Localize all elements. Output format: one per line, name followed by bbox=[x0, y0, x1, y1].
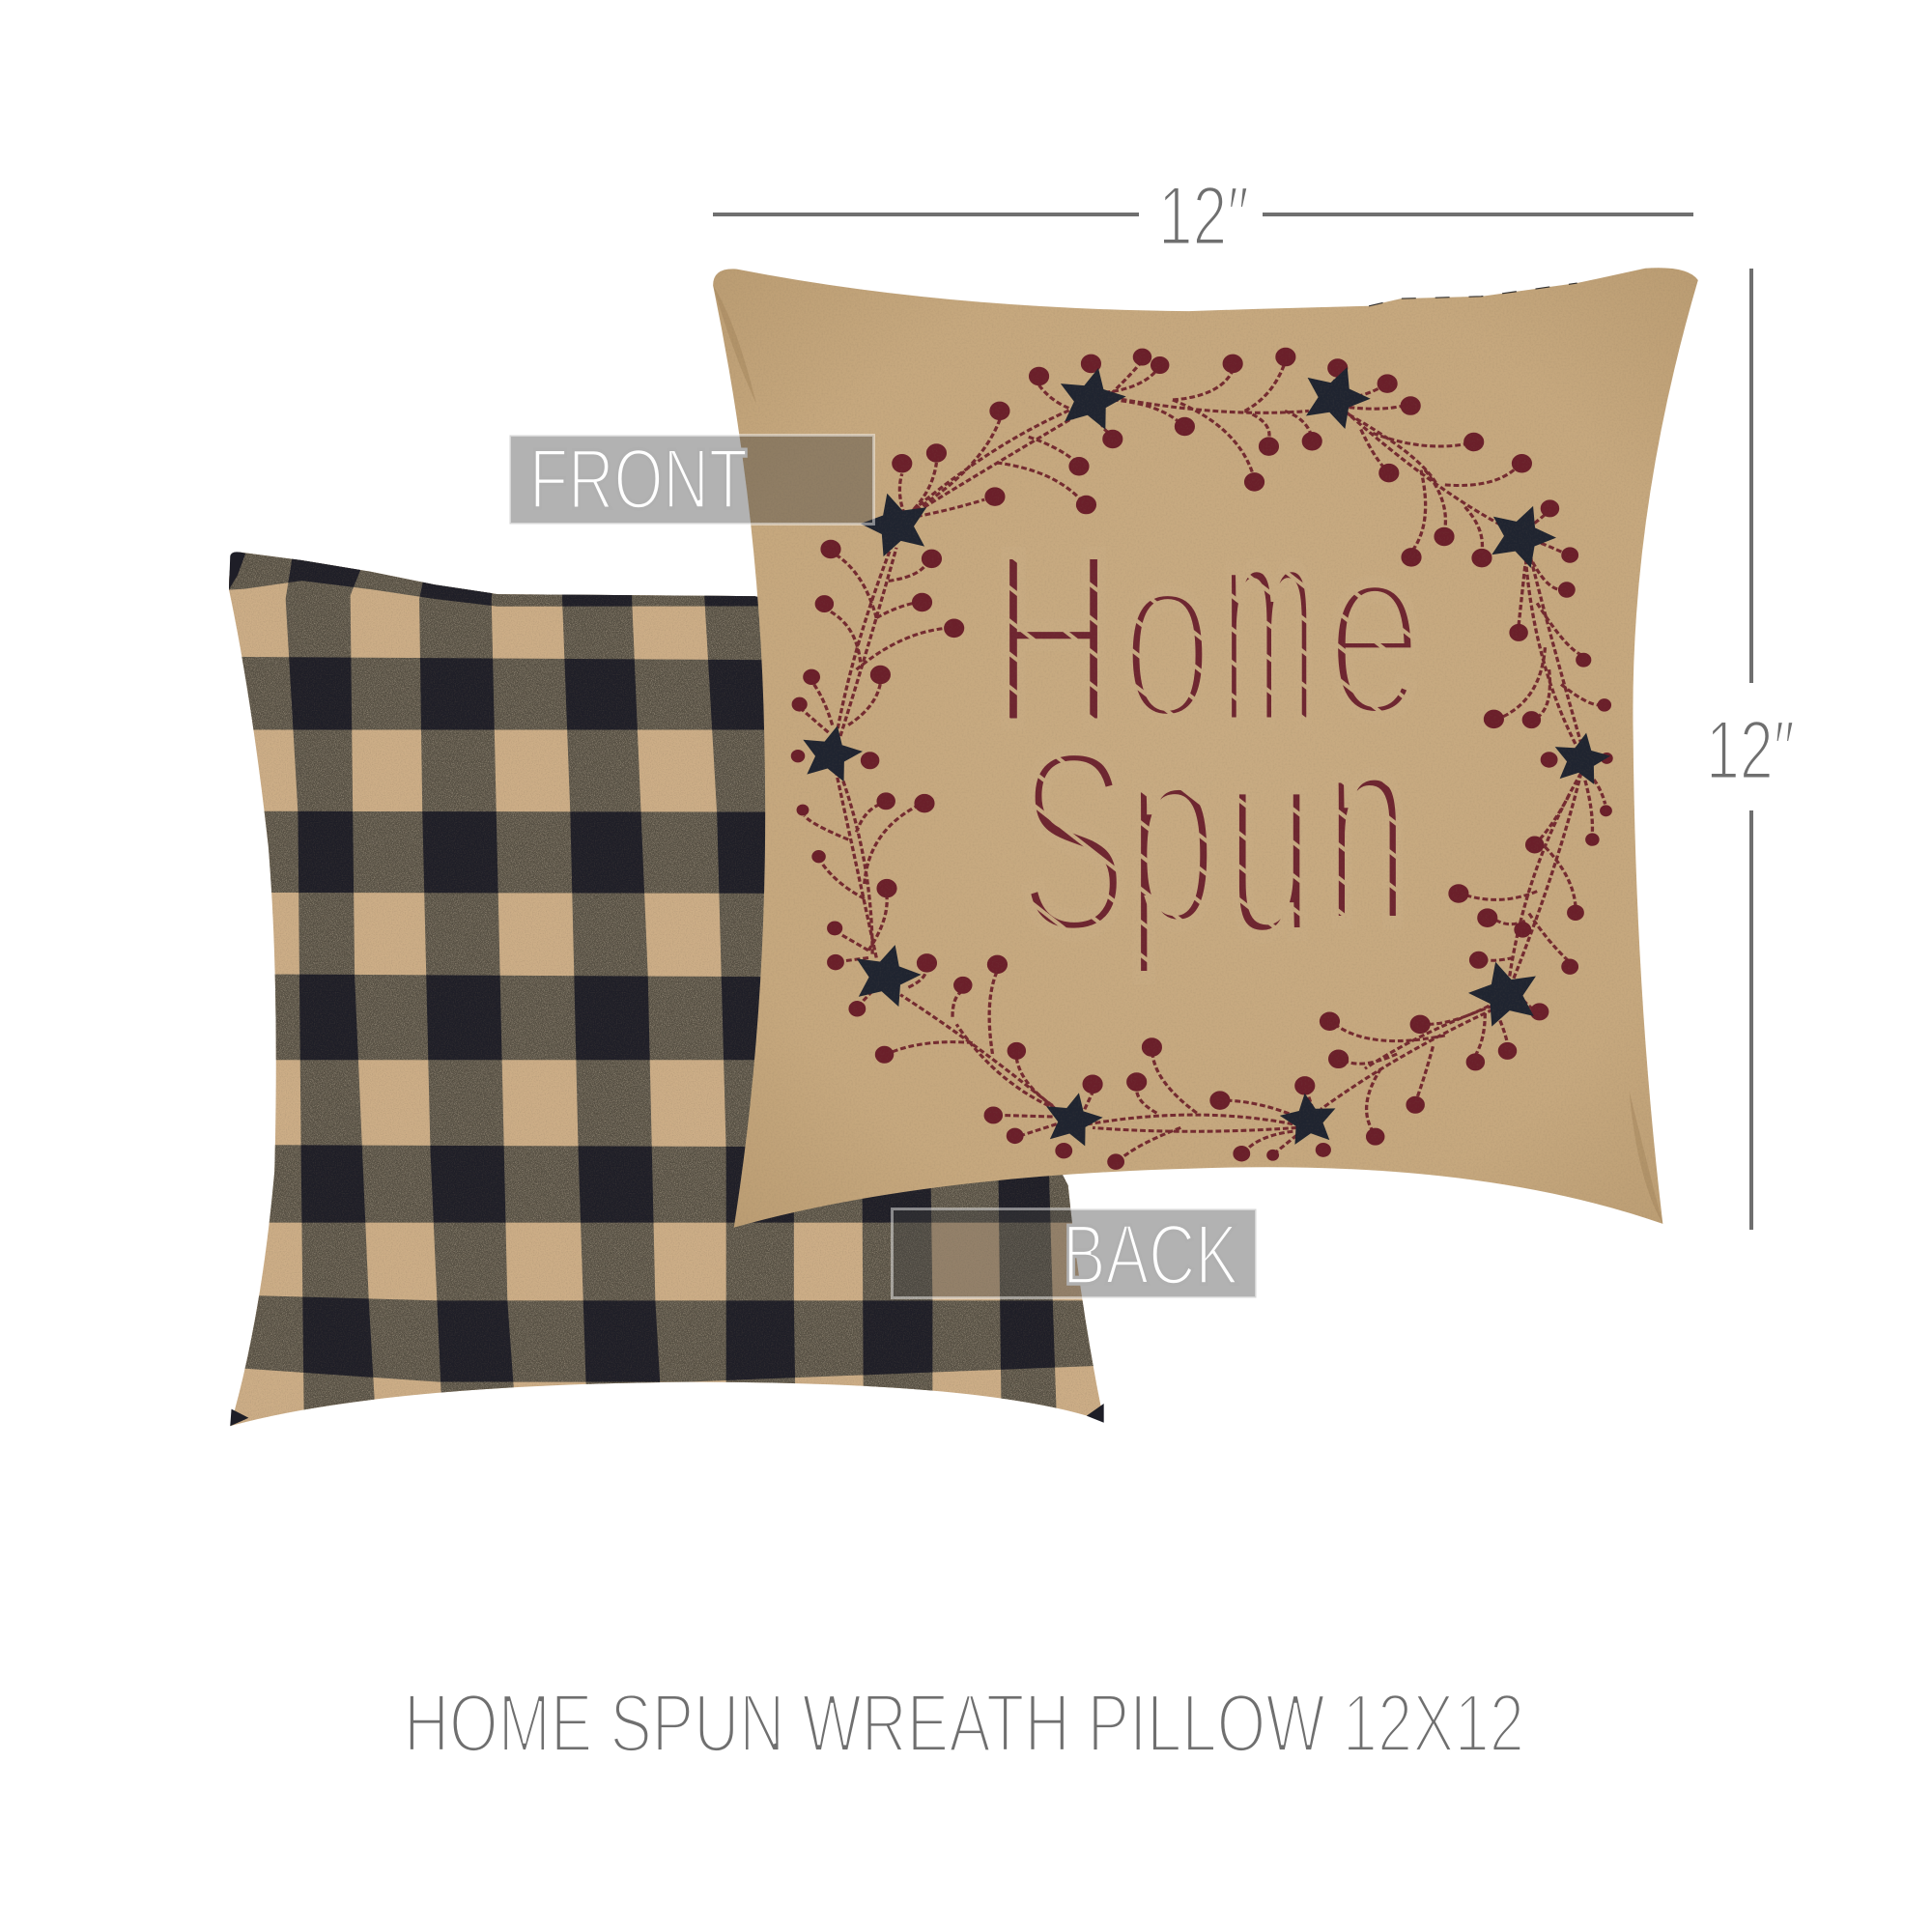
embroidered text: Home: H bbox=[991, 498, 1116, 778]
dark check intersections bbox=[286, 541, 1057, 1430]
red berries bbox=[791, 348, 1612, 1169]
width dimension: 12 inches bbox=[713, 170, 1693, 263]
width dimension: 12 inches: 12″ bbox=[1158, 170, 1249, 263]
label: BACK bbox=[893, 1207, 1256, 1302]
panel: back pillow, black and tan buffalo check bbox=[229, 552, 1104, 1426]
embroidered text: Home: e bbox=[1326, 491, 1423, 768]
dark piping at the back pillow corners bbox=[229, 552, 1104, 1426]
front pillow fabric weave texture bbox=[730, 290, 1663, 1210]
title: HOME SPUN WREATH PILLOW 12X12 bbox=[404, 1678, 1524, 1770]
embroidered text: Home: o bbox=[1122, 503, 1213, 769]
embroidered text: Spun: p bbox=[1125, 689, 1218, 980]
embroidered text: Spun: S bbox=[1018, 695, 1128, 988]
wreath bbox=[791, 348, 1614, 1169]
vertical check bands bbox=[286, 541, 1057, 1430]
label: BACK: BACK bbox=[1063, 1207, 1238, 1302]
fabric weave texture bbox=[230, 559, 1100, 1426]
navy stars bbox=[796, 356, 1614, 1149]
front pillow fabric bbox=[713, 268, 1698, 1228]
panel: front pillow with embroidered wreath bbox=[713, 268, 1698, 1228]
darker stuffing shading at the corners bbox=[713, 285, 1662, 1224]
embroidered words on front pillow bbox=[991, 457, 1423, 993]
back pillow base fabric bbox=[229, 553, 1101, 1426]
horizontal check bands bbox=[229, 553, 1094, 1382]
dark back fabric peeking at the top seam bbox=[1369, 283, 1577, 306]
height dimension: 12 inches: 12″ bbox=[1706, 704, 1795, 797]
label: FRONT: FRONT bbox=[529, 431, 748, 526]
embroidered text: Home: m bbox=[1221, 457, 1317, 788]
infographic canvas bbox=[229, 187, 1793, 1750]
embroidered text: Spun: n bbox=[1324, 671, 1409, 981]
height dimension: 12 inches bbox=[1706, 269, 1795, 1230]
embroidered text: Spun: u bbox=[1225, 683, 1315, 993]
stitched vine stems bbox=[803, 363, 1605, 1159]
heathered speckle on the mid-tone bands bbox=[229, 553, 1094, 1409]
